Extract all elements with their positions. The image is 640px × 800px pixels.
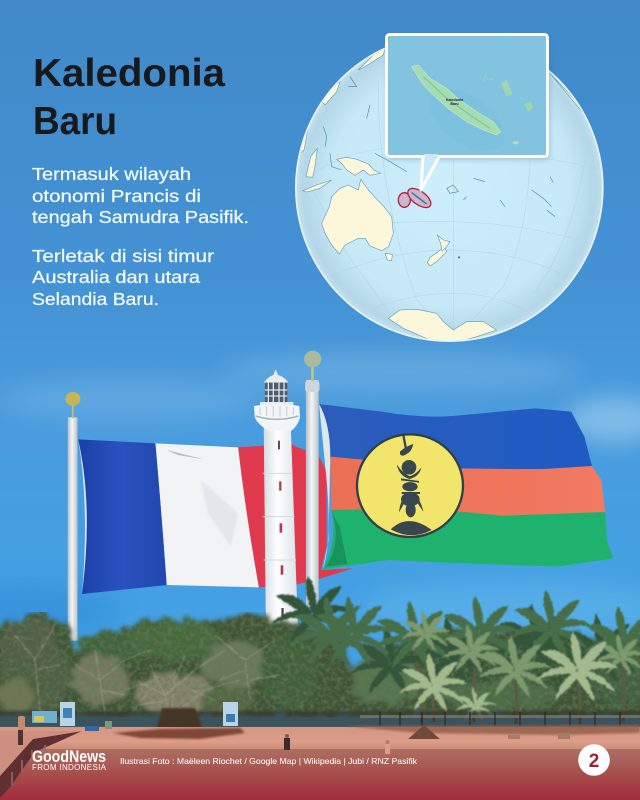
people on beach [18, 716, 390, 754]
title [33, 52, 225, 143]
tree line [0, 576, 640, 735]
French flag [78, 439, 353, 594]
description text: Australia dan utara [32, 267, 200, 287]
flagpole left [65, 392, 80, 641]
logo: GoodNews from Indonesia [32, 748, 107, 772]
boardwalk [0, 731, 83, 798]
photo credits: Ilustrasi Foto : Maëleen Riochet / Google Map | Wikipedia | Jubi / RNZ Pasifik [120, 757, 418, 766]
flag emblem [357, 434, 463, 537]
palm trunks [413, 640, 624, 724]
New Caledonia flag [319, 404, 613, 569]
callout: New Caledonia inset map [386, 34, 549, 190]
description text: Terletak di sisi timur [32, 246, 214, 266]
canopy mass [0, 612, 640, 717]
page number badge [578, 744, 610, 776]
logo: GoodNews from Indonesia: GoodNews [32, 748, 106, 766]
inset: main island [412, 65, 533, 164]
callout: New Caledonia inset map: Baru [450, 102, 459, 106]
title: Baru [33, 100, 117, 143]
lighthouse [254, 369, 300, 640]
marker: New Caledonia highlight [398, 185, 434, 211]
description text: Termasuk wilayah [32, 164, 191, 184]
description text: tengah Samudra Pasifik. [32, 207, 249, 227]
globe map [295, 33, 604, 343]
title: Kaledonia [33, 52, 225, 95]
palm trees [272, 576, 640, 722]
beach and sea [0, 725, 640, 800]
beach signs [32, 702, 238, 731]
page number badge: 2 [589, 751, 599, 772]
description text: Selandia Baru. [32, 289, 159, 309]
description text [32, 164, 249, 309]
flagpole right [304, 351, 321, 607]
description text: otonomi Prancis di [32, 186, 201, 206]
inset label: Kaledonia [446, 98, 464, 102]
bare tree branches [15, 625, 280, 728]
undergrowth band [0, 711, 640, 728]
logo: GoodNews from Indonesia: FROM INDONESIA [32, 763, 107, 772]
